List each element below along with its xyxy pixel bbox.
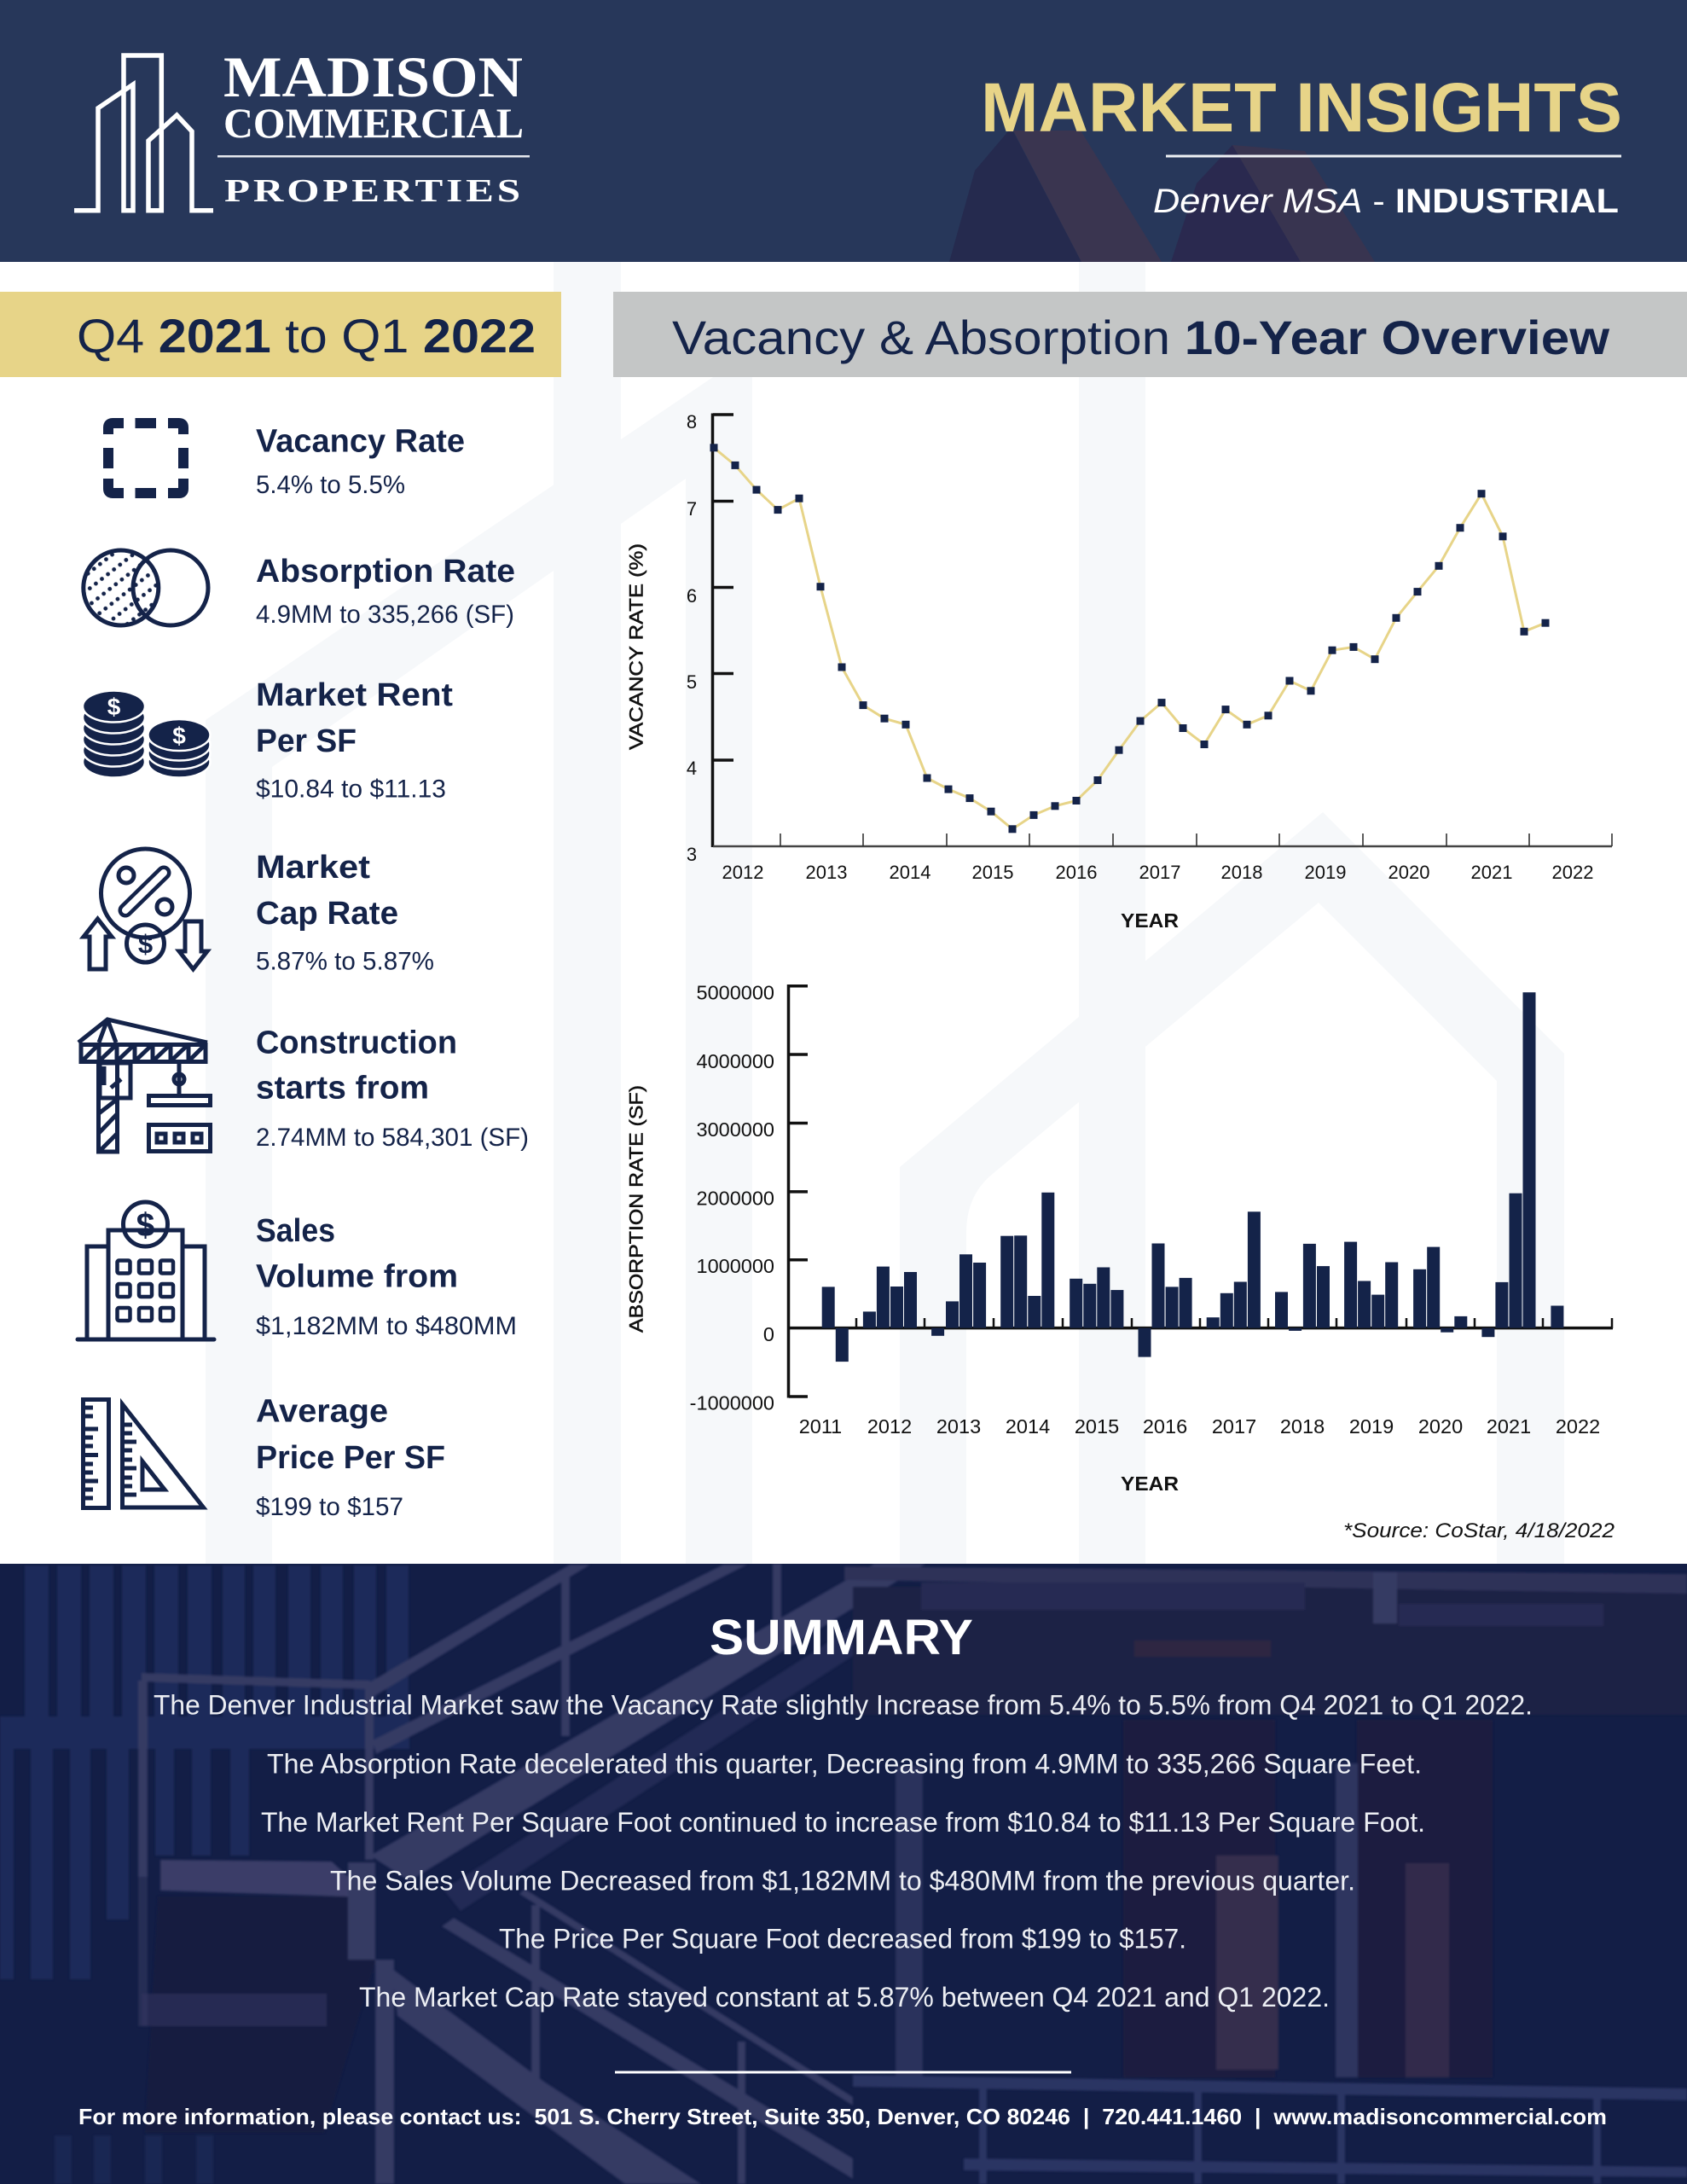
y axis title: VACANCY RATE (%): [626, 543, 646, 750]
x axis labels: 2012: [867, 1415, 912, 1438]
y axis labels: [687, 411, 697, 865]
summary heading: SUMMARY: [710, 1610, 973, 1665]
metric: market rent: [83, 677, 467, 804]
metric: construction starts: Construction: [256, 1025, 457, 1061]
vacancy series line with markers: [714, 448, 1545, 829]
icon: ruler and set square: [84, 1399, 203, 1508]
y axis labels: 7: [687, 498, 697, 520]
metric: absorption rate: 4.9MM to 335,266 (SF): [256, 601, 514, 629]
summary text: The Market Cap Rate stayed constant at 5.87% between Q4 2021 and Q1 2022.: [359, 1982, 1330, 2013]
metric: market cap rate: 5.87% to 5.87%: [256, 947, 434, 976]
footer panel: summary and contact: [0, 1564, 1687, 2184]
heading bar: 10-year overview: Vacancy & Absorption 10-Year Overview: [672, 311, 1609, 364]
y axis labels: 1000000: [696, 1255, 774, 1277]
bar chart: absorption rate: [624, 981, 1615, 1542]
summary text: The Denver Industrial Market saw the Vacancy Rate slightly Increase from 5.4% to 5.5% from Q4 2021 to Q1 2022.: [154, 1689, 1533, 1720]
x axis labels: 2018: [1221, 862, 1262, 883]
y axis labels: 5: [687, 671, 697, 693]
x axis labels: 2012: [722, 862, 763, 883]
metric: sales volume: [76, 1201, 519, 1342]
icon: tower crane: [78, 1019, 210, 1152]
x axis labels: 2021: [1487, 1415, 1531, 1438]
icon: bank building: $: [136, 1207, 155, 1244]
metric: absorption rate: Absorption Rate: [256, 554, 515, 590]
x axis labels: 2016: [1143, 1415, 1187, 1438]
watermark: building outline background: [206, 262, 1564, 1564]
x axis labels: 2015: [972, 862, 1013, 883]
x axis labels: 2019: [1305, 862, 1346, 883]
metric: construction starts: 2.74MM to 584,301 (SF): [256, 1124, 529, 1152]
icon: bank building: [78, 1202, 214, 1339]
x axis labels: 2019: [1349, 1415, 1394, 1438]
y axis labels: 3: [687, 844, 697, 865]
contact line: For more information, please contact us: 501 S. Cherry Street, Suite 350, Denver, CO 80246 | 720.441.1460 | www.madisoncommercial.com: [78, 2104, 1607, 2129]
metric: vacancy rate: [103, 417, 465, 499]
x axis labels: [799, 1415, 1600, 1438]
icon: overlapping circles: [84, 550, 208, 625]
x axis labels: 2011: [799, 1415, 842, 1438]
subtitle: Denver MSA Industrial: Denver MSA - INDUSTRIAL: [1153, 183, 1619, 220]
heading bar: quarter range: [0, 292, 561, 377]
metric: average price per SF: Average: [256, 1394, 388, 1430]
y axis labels: 6: [687, 585, 697, 607]
icon: coin stacks: $: [172, 723, 186, 749]
summary text: The Price Per Square Foot decreased from $199 to $157.: [499, 1923, 1186, 1954]
y axis title: ABSORPTION RATE (SF): [626, 1085, 646, 1333]
metric: market rent: Per SF: [256, 723, 357, 759]
metric: market cap rate: [82, 846, 440, 976]
metric: market rent: $10.84 to $11.13: [256, 775, 446, 804]
x axis labels: 2020: [1418, 1415, 1463, 1438]
metric: construction starts: [78, 1019, 530, 1154]
icon: percent with arrows: [84, 849, 207, 969]
metric: market cap rate: Market: [256, 850, 370, 886]
metric: construction starts: starts from: [256, 1070, 429, 1106]
x axis labels: 2015: [1075, 1415, 1119, 1438]
heading bar: quarter range: Q4 2021 to Q1 2022: [77, 309, 536, 363]
heading bar: 10-year overview: [613, 292, 1687, 377]
y axis labels: 2000000: [696, 1188, 774, 1210]
y axis labels: -1000000: [690, 1392, 774, 1414]
y axis labels: 8: [687, 411, 697, 433]
metric: sales volume: Sales: [256, 1213, 335, 1249]
x axis labels: 2014: [1006, 1415, 1050, 1438]
icon: coin stacks: $: [107, 694, 121, 720]
y axis labels: 3000000: [696, 1118, 774, 1141]
x axis labels: [722, 862, 1593, 883]
x axis labels: 2013: [936, 1415, 981, 1438]
y axis labels: 5000000: [696, 981, 774, 1003]
logo: Madison Commercial Properties: PROPERTIES: [224, 173, 524, 209]
x axis labels: 2016: [1056, 862, 1097, 883]
title: Market Insights: MARKET INSIGHTS: [981, 69, 1622, 147]
y axis labels: 0: [763, 1323, 774, 1345]
y axis labels: 4: [687, 758, 697, 779]
metric: average price per SF: [81, 1394, 448, 1521]
icon: coin stacks: [83, 691, 210, 778]
metric: market rent: Market Rent: [256, 677, 453, 713]
x axis labels: 2017: [1139, 862, 1180, 883]
metric: absorption rate: [82, 548, 517, 630]
summary text: The Absorption Rate decelerated this quarter, Decreasing from 4.9MM to 335,266 Square Feet.: [267, 1749, 1422, 1780]
x axis labels: 2017: [1212, 1415, 1256, 1438]
summary text: The Sales Volume Decreased from $1,182MM to $480MM from the previous quarter.: [330, 1865, 1355, 1896]
icon: dashed square: [108, 423, 183, 493]
metric: sales volume: Volume from: [256, 1259, 458, 1295]
x axis labels: 2018: [1280, 1415, 1325, 1438]
metric: market cap rate: Cap Rate: [256, 896, 398, 932]
metric: vacancy rate: 5.4% to 5.5%: [256, 471, 405, 499]
panel: key metrics list: [73, 410, 534, 1527]
y axis labels: 4000000: [696, 1050, 774, 1072]
summary text: [154, 1689, 1533, 2013]
x axis labels: 2013: [806, 862, 847, 883]
logo: Madison Commercial Properties: COMMERCIAL: [223, 99, 524, 147]
metric: average price per SF: Price Per SF: [256, 1440, 445, 1476]
source note: *Source: CoStar, 4/18/2022: [1343, 1519, 1615, 1542]
x axis labels: 2021: [1471, 862, 1512, 883]
logo: Madison Commercial Properties: MADISON: [223, 44, 523, 109]
x axis title: YEAR: [1121, 909, 1179, 932]
y axis labels: [690, 981, 774, 1414]
summary text: The Market Rent Per Square Foot continued to increase from $10.84 to $11.13 Per Square Foot.: [261, 1807, 1425, 1838]
header band: [0, 0, 1687, 262]
metric: vacancy rate: Vacancy Rate: [256, 423, 465, 459]
icon: percent with arrows: $: [138, 929, 153, 959]
metric: sales volume: $1,182MM to $480MM: [256, 1312, 517, 1340]
x axis title: YEAR: [1121, 1472, 1179, 1495]
x axis labels: 2020: [1388, 862, 1429, 883]
metric: average price per SF: $199 to $157: [256, 1493, 403, 1521]
line chart: vacancy rate: [624, 411, 1614, 932]
footer background: industrial staircase photo: [0, 1564, 1687, 2184]
absorption bars: [822, 992, 1563, 1362]
x axis labels: 2022: [1556, 1415, 1600, 1438]
logo: Madison Commercial Properties: [74, 44, 530, 211]
x axis labels: 2014: [890, 862, 930, 883]
x axis labels: 2022: [1552, 862, 1593, 883]
